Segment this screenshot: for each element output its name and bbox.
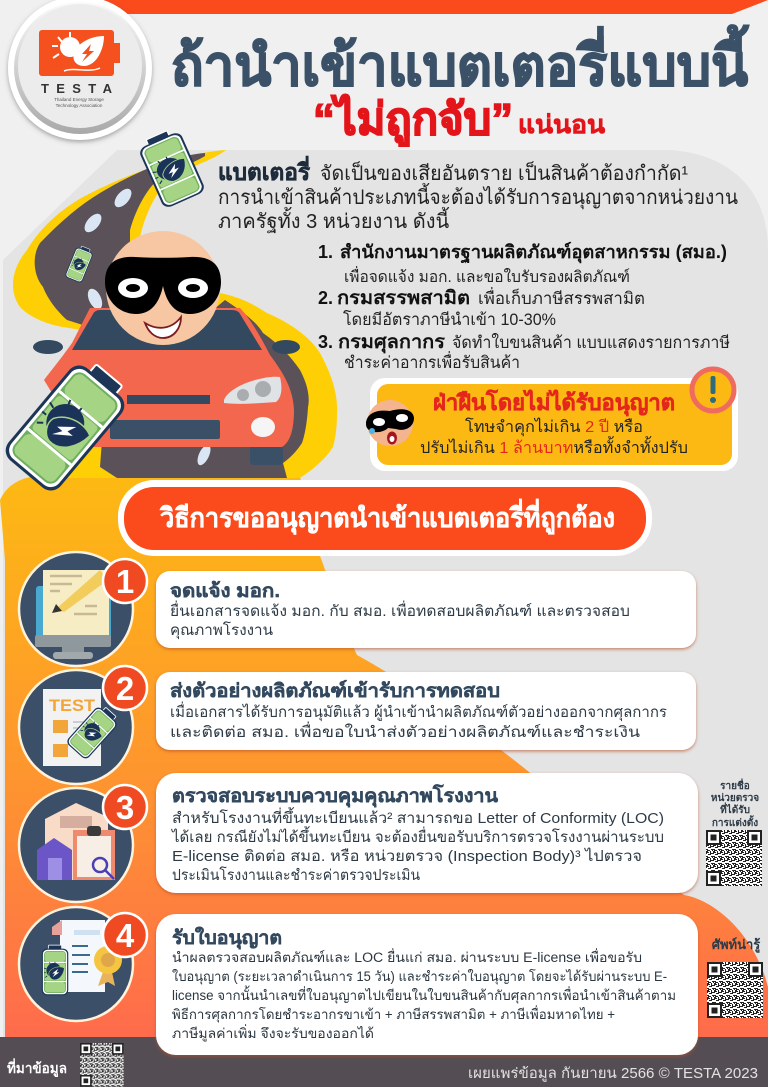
step 3 number badge: 3 bbox=[116, 789, 134, 826]
step 2 card bbox=[156, 672, 696, 750]
QR block: glossary bbox=[707, 937, 763, 1018]
step 3 card: E-license ติดต่อ สมอ. หรือ หน่วยตรวจ (Inspection Body)³ ไปตรวจ bbox=[172, 847, 642, 865]
step 3 card: ประเมินโรงงานและชำระค่าตรวจประเมิน bbox=[172, 866, 420, 884]
icon: exclamation alert bbox=[692, 369, 734, 411]
agency list: 1. bbox=[318, 242, 333, 262]
agency list: 3. bbox=[318, 332, 333, 352]
agency list: 2. bbox=[318, 288, 333, 308]
orange steps background bbox=[0, 477, 768, 1037]
intro text: จัดเป็นของเสียอันตราย เป็นสินค้าต้องกำกัด¹ bbox=[320, 160, 688, 185]
step 2 card: และติดต่อ สมอ. เพื่อขอใบนำส่งตัวอย่างผลิตภัณฑ์และชำระเงิน bbox=[170, 721, 640, 741]
step 3 card: สำหรับโรงงานที่ขึ้นทะเบียนแล้ว² สามารถขอ Letter of Conformity (LOC) bbox=[172, 807, 664, 827]
step 2 number badge: 2 bbox=[116, 670, 134, 707]
logo badge: TESTA bbox=[41, 81, 113, 96]
warning callout: ปรับไม่เกิน 1 ล้านบาทหรือทั้งจำทั้งปรับ bbox=[420, 436, 688, 457]
step 1 number badge: 1 bbox=[116, 563, 134, 600]
QR block: inspection body list: ที่ได้รับ bbox=[720, 802, 750, 816]
step 4 number badge bbox=[103, 913, 147, 957]
intro text: การนำเข้าสินค้าประเภทนี้จะต้องได้รับการอนุญาตจากหน่วยงาน bbox=[218, 183, 738, 210]
agency list: จัดทำใบขนสินค้า แบบแสดงรายการภาษี bbox=[452, 333, 730, 352]
intro text bbox=[218, 155, 738, 233]
footer bar bbox=[0, 1037, 768, 1087]
step 4 card: ใบอนุญาต (ระยะเวลาดำเนินการ 15 วัน) และชำระค่าใบอนุญาต โดยจะได้รับผ่านระบบ E- bbox=[172, 968, 667, 985]
illustration: masked smiling face bbox=[105, 231, 221, 345]
agency list: สำนักงานมาตรฐานผลิตภัณฑ์อุตสาหกรรม (สมอ.) bbox=[340, 241, 727, 264]
illustration: tiny battery on road bbox=[64, 244, 94, 283]
icon: crying masked face bbox=[366, 400, 414, 446]
footer source and QR bbox=[7, 1043, 124, 1087]
step 3 card bbox=[156, 773, 698, 893]
section heading pill bbox=[118, 480, 652, 556]
logo badge: Technology Association bbox=[56, 103, 103, 108]
step 1 card bbox=[156, 571, 696, 648]
step 3 card: ได้เลย กรณียังไม่ได้ขึ้นทะเบียน จะต้องยื่นขอรับบริการตรวจโรงงานผ่านระบบ bbox=[171, 826, 664, 846]
step 3 card: ตรวจสอบระบบควบคุมคุณภาพโรงงาน bbox=[172, 784, 498, 808]
step 4 icon: certificate and battery bbox=[19, 907, 133, 1021]
step 4 card bbox=[156, 914, 698, 1055]
agency list: ชำระค่าอากรเพื่อรับสินค้า bbox=[344, 351, 520, 372]
illustration: road bbox=[13, 150, 337, 478]
title: ถ้านำเข้าแบตเตอรี่แบบนี้ bbox=[171, 25, 749, 97]
step 1 card: ยื่นเอกสารจดแจ้ง มอก. กับ สมอ. เพื่อทดสอบผลิตภัณฑ์ และตรวจสอบ bbox=[170, 600, 630, 620]
step 1 card: คุณภาพโรงงาน bbox=[170, 621, 273, 640]
step 1 card: จดแจ้ง มอก. bbox=[170, 580, 280, 602]
step 2 card: ส่งตัวอย่างผลิตภัณฑ์เข้ารับการทดสอบ bbox=[170, 680, 500, 702]
warning callout bbox=[366, 369, 738, 471]
illustration: small battery at top of road bbox=[136, 126, 206, 209]
footer source and QR: ที่มาข้อมูล bbox=[7, 1058, 67, 1077]
step 4 card: ภาษีมูลค่าเพิ่ม จึงจะรับของออกได้ bbox=[172, 1024, 374, 1042]
section heading pill: วิธีการขออนุญาตนำเข้าแบตเตอรี่ที่ถูกต้อง bbox=[159, 498, 615, 535]
step 2 icon: test sheet and battery: TEST bbox=[49, 696, 96, 715]
top orange bar bbox=[95, 0, 768, 14]
warning callout: โทษจำคุกไม่เกิน 2 ปี หรือ bbox=[465, 417, 643, 437]
agency list: โดยมีอัตราภาษีนำเข้า 10-30% bbox=[343, 310, 556, 329]
intro text: แบตเตอรี่ bbox=[218, 155, 311, 185]
step 4 card: พิธีการศุลกากรโดยชำระอากรขาเข้า + ภาษีสรรพสามิต + ภาษีเพื่อมหาดไทย + bbox=[172, 1005, 615, 1023]
logo badge: Thailand Energy Storage bbox=[54, 97, 104, 102]
step 2 card: เมื่อเอกสารได้รับการอนุมัติแล้ว ผู้นำเข้านำผลิตภัณฑ์ตัวอย่างออกจากศุลกากร bbox=[170, 701, 667, 722]
footer publication credit: เผยแพร่ข้อมูล กันยายน 2566 © TESTA 2023 bbox=[468, 1065, 758, 1082]
step 4 card: license จากนั้นนำเลขที่ใบอนุญาตไปเขียนในใบขนสินค้ากับศุลกากรเพื่อนำเข้าสินค้าตาม bbox=[172, 985, 676, 1004]
subtitle bbox=[313, 93, 605, 146]
agency list: กรมศุลกากร bbox=[338, 332, 446, 354]
step 4 card: รับใบอนุญาต bbox=[172, 926, 282, 950]
step 2 icon: test sheet and battery bbox=[19, 670, 133, 784]
step 4 card: นำผลตรวจสอบผลิตภัณฑ์และ LOC ยื่นแก่ สมอ. ผ่านระบบ E-license เพื่อขอรับ bbox=[172, 948, 642, 965]
step 3 icon: factory and clipboard bbox=[19, 788, 133, 902]
step 2 number badge bbox=[103, 666, 147, 710]
logo badge bbox=[8, 0, 152, 140]
agency list bbox=[318, 241, 730, 372]
step 4 number badge: 4 bbox=[116, 917, 135, 954]
step 1 icon: computer and pencil bbox=[19, 552, 133, 666]
agency list: เพื่อจดแจ้ง มอก. และขอใบรับรองผลิตภัณฑ์ bbox=[344, 266, 630, 286]
warning callout: ฝ่าฝืนโดยไม่ได้รับอนุญาต bbox=[433, 389, 675, 417]
subtitle: “ไม่ถูกจับ” bbox=[313, 93, 513, 146]
step 1 number badge bbox=[103, 559, 147, 603]
intro text: ภาครัฐทั้ง 3 หน่วยงาน ดังนี้ bbox=[218, 207, 450, 233]
subtitle: แน่นอน bbox=[518, 111, 605, 139]
QR block: inspection body list: รายชื่อ bbox=[720, 778, 750, 792]
QR block: inspection body list: หน่วยตรวจ bbox=[711, 792, 759, 804]
QR block: inspection body list bbox=[706, 778, 762, 886]
illustration: red car bbox=[33, 308, 300, 465]
QR block: glossary: ศัพท์น่ารู้ bbox=[712, 937, 760, 953]
agency list: เพื่อเก็บภาษีสรรพสามิต bbox=[478, 287, 645, 308]
QR block: inspection body list: การแต่งตั้ง bbox=[712, 815, 758, 829]
agency list: กรมสรรพสามิต bbox=[337, 288, 470, 309]
illustration: large tilted battery bbox=[0, 353, 135, 496]
step 3 number badge bbox=[103, 785, 147, 829]
